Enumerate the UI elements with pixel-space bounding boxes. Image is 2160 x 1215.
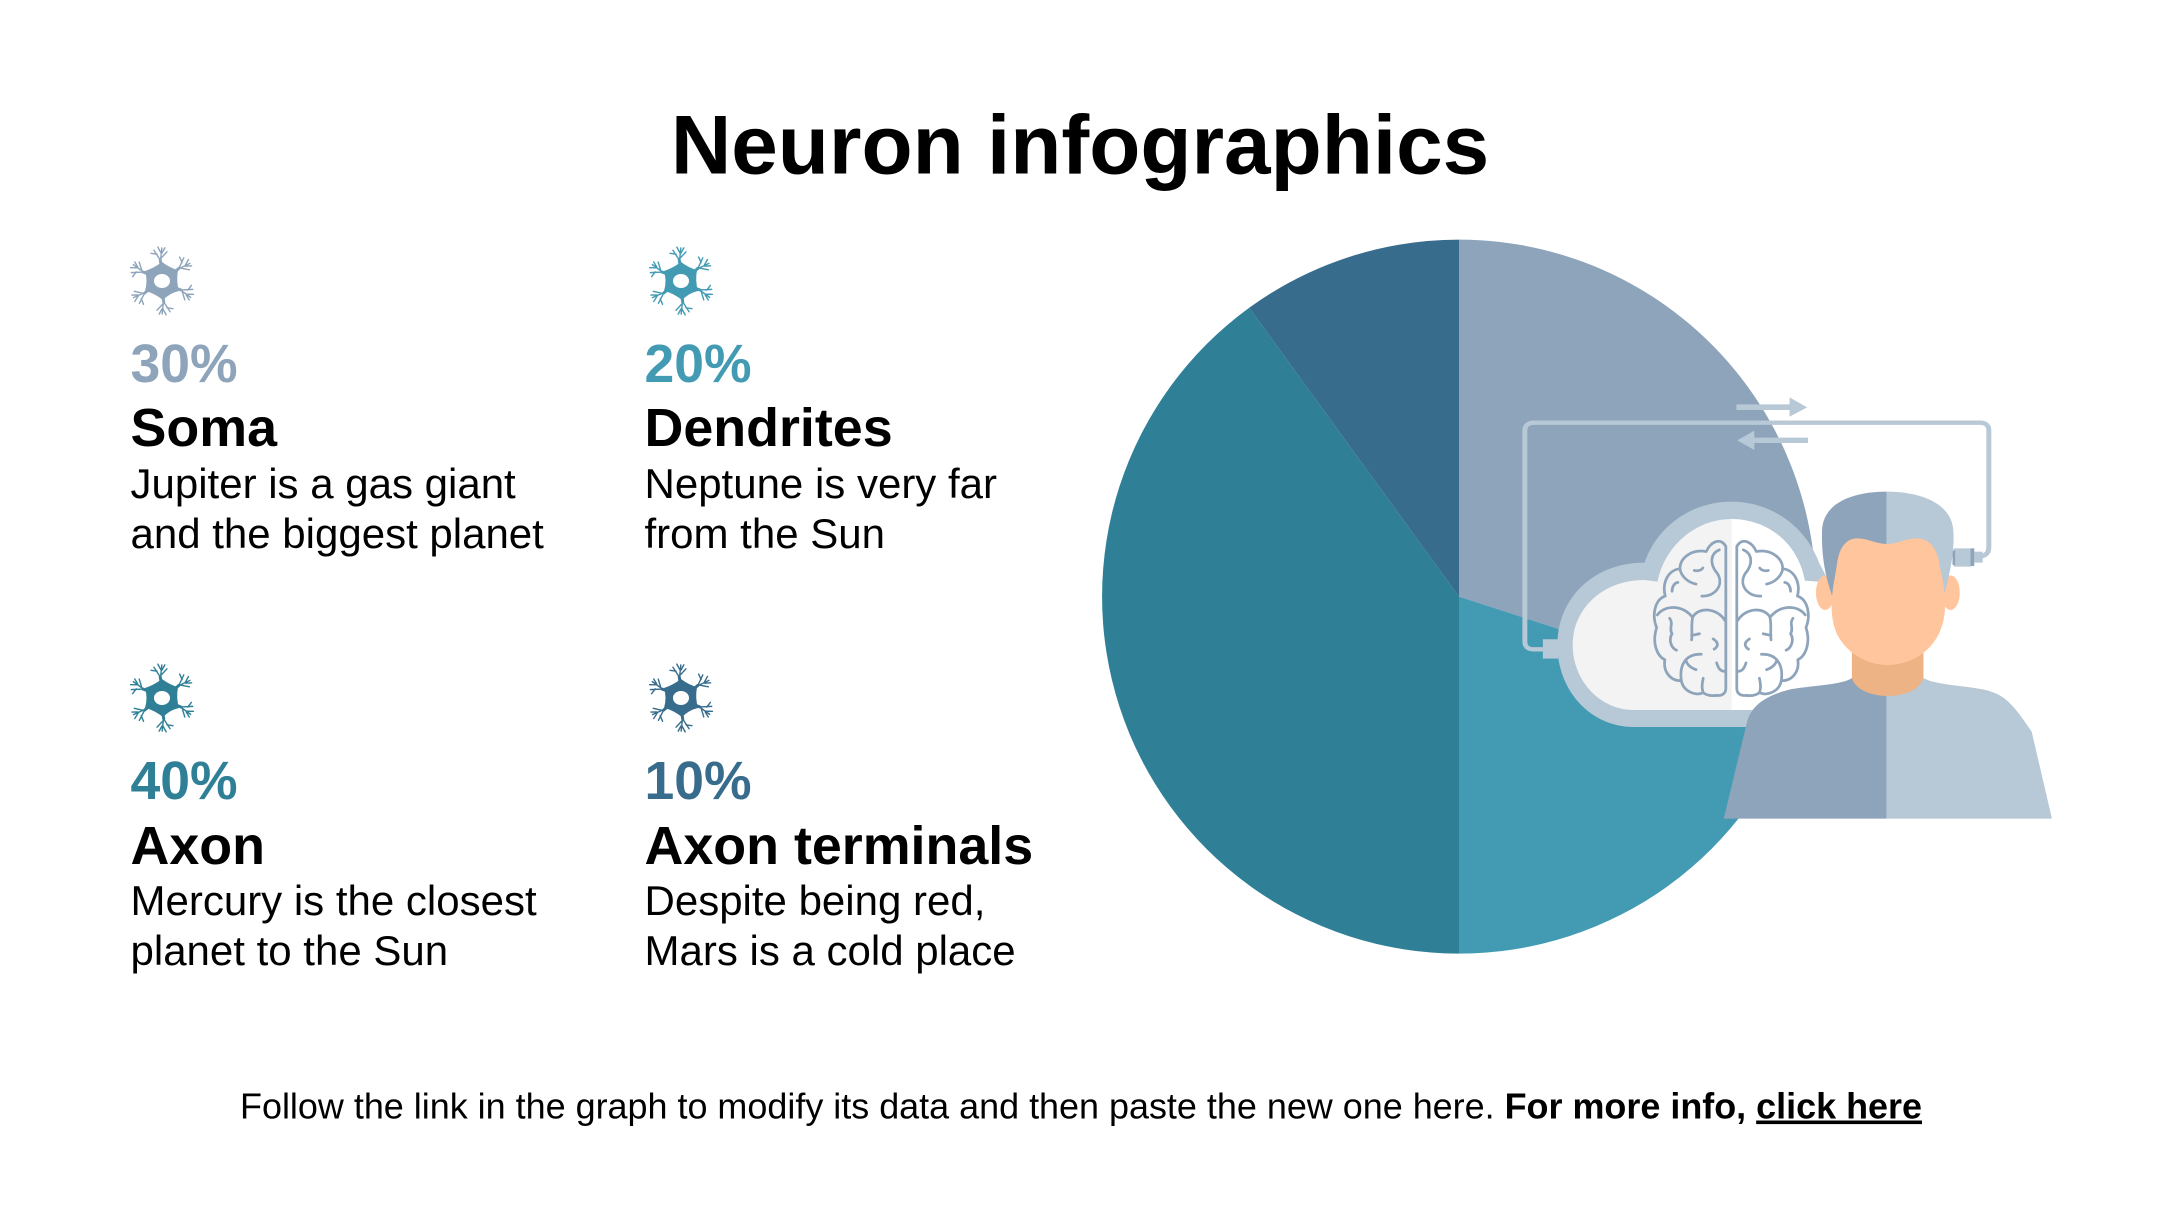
panel: axon terminals	[644, 664, 1033, 974]
axon percentage: 40%	[130, 752, 238, 811]
axon heading: Axon	[130, 816, 265, 876]
slice: soma 30%	[1459, 240, 1816, 707]
arrows and connecting wire	[1525, 397, 1989, 659]
soma percentage: 30%	[130, 335, 238, 394]
axon terminals percentage: 10%	[644, 752, 752, 811]
dendrites heading: Dendrites	[644, 398, 893, 458]
panel: axon	[127, 664, 537, 974]
footer note: Follow the link in the graph to modify its data and then paste the new one here. For more info, click here	[240, 1086, 1922, 1126]
soma heading: Soma	[130, 398, 278, 458]
person	[1724, 492, 2052, 819]
illustration: person connected to brain cloud	[1525, 397, 2052, 819]
dendrites percentage: 20%	[644, 335, 752, 394]
dendrites description: from the Sun	[644, 510, 885, 557]
slice: axon terminals 10%	[1249, 240, 1459, 597]
cloud	[1557, 502, 1837, 727]
title: Neuron infographics	[671, 98, 1489, 192]
torso	[1724, 678, 1887, 819]
icon: axon neuron	[127, 664, 197, 732]
brain icon	[1654, 541, 1808, 696]
axon description: planet to the Sun	[130, 927, 448, 974]
axon terminals heading: Axon terminals	[644, 816, 1033, 876]
panel: soma	[127, 247, 544, 557]
axon terminals description: Mars is a cold place	[644, 927, 1016, 974]
icon: soma neuron	[127, 247, 197, 315]
axon terminals description: Despite being red,	[644, 877, 985, 924]
neck	[1852, 647, 1923, 696]
panel: dendrites	[644, 247, 997, 557]
soma description: Jupiter is a gas giant	[130, 460, 516, 507]
slice: dendrites 20%	[1459, 597, 1798, 954]
ears	[1816, 575, 1834, 610]
icon: dendrites neuron	[646, 247, 716, 315]
soma description: and the biggest planet	[130, 510, 544, 557]
hair	[1822, 492, 1887, 600]
dendrites description: Neptune is very far	[644, 460, 997, 507]
icon: axon terminals neuron	[646, 664, 716, 732]
pie chart	[1102, 240, 1816, 954]
slice: axon 40%	[1102, 308, 1459, 954]
axon description: Mercury is the closest	[130, 877, 537, 924]
face	[1832, 538, 1945, 665]
